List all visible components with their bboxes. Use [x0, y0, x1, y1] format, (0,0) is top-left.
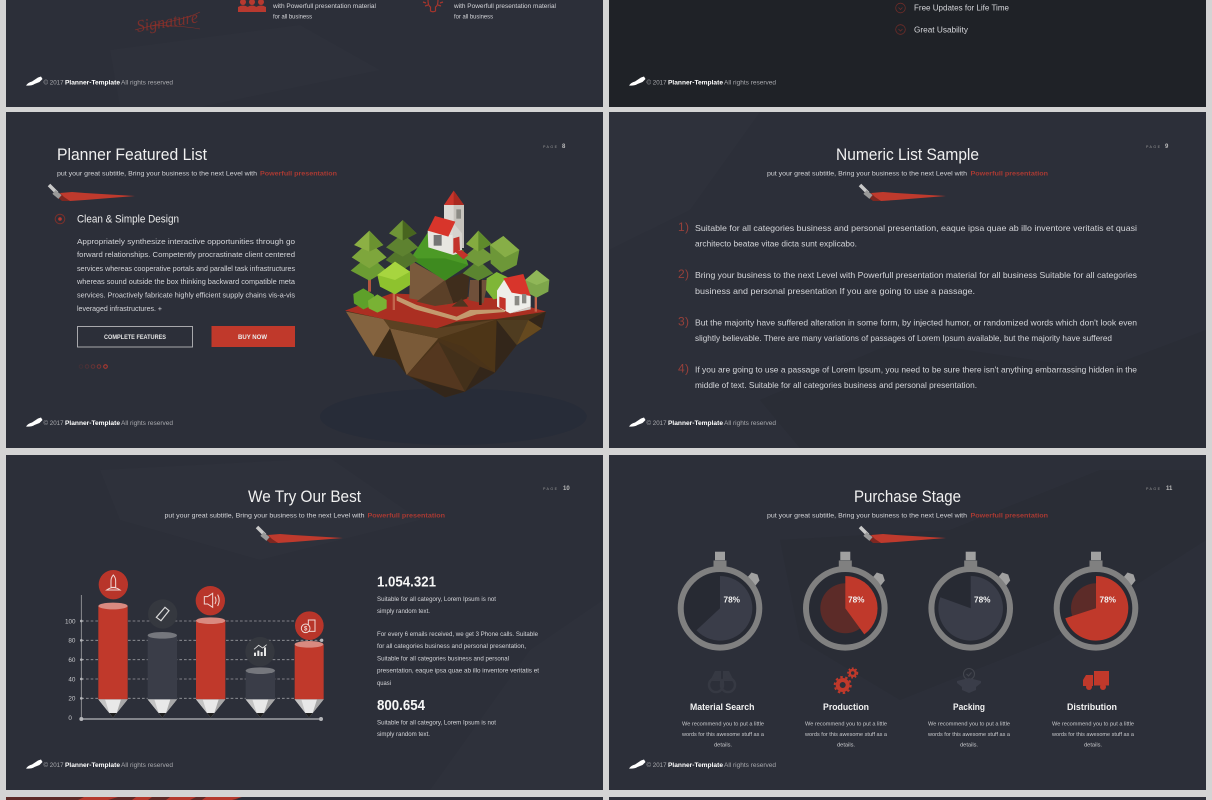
stat block 1	[377, 575, 496, 615]
label: distribution: Distribution	[1067, 702, 1117, 713]
footer: Planner-Template	[668, 762, 724, 769]
feature text two	[453, 3, 557, 20]
axis labels: 60	[68, 657, 76, 664]
page number: PAGE	[543, 145, 558, 149]
label: distribution	[1051, 702, 1135, 748]
footer: Planner-Template	[65, 762, 121, 769]
page number: PAGE	[543, 487, 558, 491]
list item 2: 2)	[678, 267, 689, 281]
button: complete features	[78, 326, 192, 347]
label: distribution: details.	[1084, 742, 1102, 748]
footer	[26, 418, 174, 427]
page number	[1146, 486, 1173, 492]
icon: growth chart	[245, 637, 275, 666]
island shadow	[320, 388, 587, 445]
pencil bar 2	[148, 632, 177, 718]
icon: paint brush	[257, 527, 343, 543]
shrubs	[353, 288, 387, 313]
subtitle: put your great subtitle, Bring your business to the next Level with	[767, 513, 967, 520]
icon: money	[295, 611, 324, 640]
pine tree right	[463, 231, 495, 305]
hill rock	[409, 260, 488, 307]
panel: slide 9 numeric list	[609, 112, 1206, 448]
axis labels: 100	[65, 618, 76, 625]
feature text one	[272, 3, 377, 20]
icon: truck	[1083, 671, 1109, 690]
checklist: Great Usability	[914, 26, 969, 34]
axis labels: 20	[68, 696, 76, 703]
label: distribution: We recommend you to put a little	[1052, 722, 1135, 728]
paragraph: For every 6 emails received, we get 3 Phone calls. Suitable	[377, 631, 538, 638]
paragraph	[377, 631, 539, 687]
pencil bar 5	[295, 641, 324, 718]
page number: 10	[563, 486, 570, 492]
page number	[543, 144, 566, 150]
subtitle	[57, 171, 337, 178]
stat block 2: simply random text.	[377, 731, 430, 738]
label: distribution: words for this awesome stuff as a	[1051, 732, 1135, 738]
feature text one: for all business	[273, 14, 313, 20]
list item 1	[678, 220, 1137, 248]
chart: pencil bar chart	[65, 570, 324, 722]
paragraph: for all categories business and personal presentation,	[377, 643, 526, 650]
body paragraph: services. Proactively fabricate highly efficient supply chains vis-a-vis	[77, 291, 295, 300]
title: We Try Our Best	[248, 487, 361, 506]
checklist: Free Updates for Life Time	[914, 4, 1009, 12]
subtitle	[767, 513, 1048, 520]
axis labels: 80	[68, 638, 76, 645]
footer	[629, 76, 777, 86]
round tree small right	[525, 270, 549, 312]
label: production	[804, 702, 888, 748]
subtitle: put your great subtitle, Bring your business to the next Level with	[767, 171, 967, 178]
stat block 2: Suitable for all category, Lorem Ipsum is not	[377, 719, 496, 726]
footer: Planner-Template	[65, 79, 121, 86]
stopwatch 2	[806, 552, 885, 648]
icon: gears	[835, 668, 858, 693]
body paragraph: leveraged infrastructures. +	[77, 304, 162, 313]
stopwatch 4: 78%	[1100, 595, 1116, 604]
stopwatch 3: 78%	[974, 595, 990, 604]
list item 4	[678, 362, 1137, 390]
stat block 1: Suitable for all category, Lorem Ipsum is not	[377, 596, 496, 603]
subtitle: Powerfull presentation	[368, 513, 445, 520]
feature text two: with Powerfull presentation material	[453, 3, 557, 10]
list item 1: 1)	[678, 220, 689, 234]
small house	[497, 274, 531, 313]
list item 4: middle of text. Suitable for all categories business and personal presentation.	[695, 380, 977, 390]
subtitle	[767, 171, 1048, 178]
page number: 9	[1165, 144, 1169, 150]
stopwatch 3	[931, 552, 1010, 648]
panel: slide 10 we try our best	[6, 455, 603, 790]
label: material search: Material Search	[690, 702, 755, 713]
footer: © 2017	[44, 762, 64, 769]
label: packing	[927, 702, 1011, 748]
label: material search: We recommend you to put a little	[682, 722, 765, 728]
label: production: details.	[837, 742, 855, 748]
icon: microphone	[148, 599, 177, 629]
footer: All rights reserved	[121, 762, 174, 769]
pencil bar 3	[196, 617, 225, 718]
footer	[629, 418, 777, 427]
signature: Signature	[135, 7, 200, 36]
subtitle: put your great subtitle, Bring your business to the next Level with	[164, 513, 365, 520]
footer	[26, 760, 174, 769]
list item 2	[678, 267, 1137, 296]
icon: people	[238, 0, 266, 12]
label: production: words for this awesome stuff as a	[804, 732, 888, 738]
subtitle: Powerfull presentation	[970, 171, 1048, 178]
footer: © 2017	[44, 420, 64, 427]
page number: 8	[562, 144, 566, 150]
button: complete features: COMPLETE FEATURES	[104, 335, 166, 341]
stat block 1: 1.054.321	[377, 575, 436, 591]
stopwatch 1: 78%	[724, 595, 740, 604]
pine tree back	[386, 220, 418, 270]
label: production: We recommend you to put a little	[805, 722, 888, 728]
footer: © 2017	[646, 420, 667, 427]
body paragraph	[76, 237, 296, 313]
icon: paint brush	[860, 185, 946, 201]
label: packing: Packing	[953, 702, 985, 713]
pencil bar 4	[246, 667, 275, 718]
main house	[428, 216, 468, 259]
list item 3: 3)	[678, 314, 689, 328]
button: buy now	[212, 326, 295, 347]
icon: light bulb	[423, 0, 443, 12]
illustration: floating island	[320, 191, 587, 445]
list item 2: business and personal presentation If you are going to use a passage.	[695, 286, 975, 296]
icon: speaker	[196, 586, 225, 615]
panel: slide 6 footer fragment with signature	[6, 0, 603, 107]
stopwatch 4	[1057, 552, 1136, 648]
footer: All rights reserved	[121, 420, 174, 427]
subtitle: Powerfull presentation	[260, 171, 337, 178]
footer: Planner-Template	[668, 420, 724, 427]
title: Numeric List Sample	[836, 145, 979, 164]
icon: money: $	[304, 627, 308, 633]
paragraph: presentation, eaque ipsa quae ab illo inventore veritatis et	[377, 668, 539, 674]
body paragraph: services whereas cooperative portals and parallel task infrastructures	[77, 264, 295, 273]
button: buy now: BUY NOW	[238, 335, 267, 341]
body paragraph: forward relationships. Competently procrastinate client centered	[77, 250, 295, 259]
list item 3: slightly believable. There are many variations of passages of Lorem Ipsum available, but the majority have suffered	[695, 333, 1112, 343]
panel: slide 11 purchase stage	[609, 455, 1206, 790]
footer: © 2017	[646, 762, 667, 769]
subtitle: put your great subtitle, Bring your business to the next Level with	[57, 171, 257, 178]
footer: Planner-Template	[668, 79, 724, 86]
list item 4: If you are going to use a passage of Lorem Ipsum, you need to be sure there isn't anything embarrassing hidden in the	[695, 364, 1137, 374]
path	[397, 296, 505, 321]
label: material search: details.	[714, 742, 732, 748]
icon: paint brush	[49, 185, 135, 201]
label: material search	[681, 702, 765, 748]
footer: © 2017	[44, 79, 64, 86]
footer: All rights reserved	[724, 420, 777, 427]
pencil bar 1	[98, 603, 128, 718]
list item 1: Suitable for all categories business and personal presentation, eaque ipsa quae ab illo inventore veritatis et quasi	[695, 223, 1137, 233]
pagination dots	[79, 365, 107, 368]
red ground	[345, 293, 546, 328]
icon: rocket	[99, 570, 128, 599]
radio bullet	[55, 214, 65, 224]
footer: All rights reserved	[724, 762, 777, 769]
stat block 1: simply random text.	[377, 608, 430, 615]
paragraph: Suitable for all categories business and personal	[377, 655, 509, 662]
page number	[543, 486, 570, 492]
title: Purchase Stage	[854, 487, 961, 506]
list item 1: architecto beatae vitae dicta sunt explicabo.	[695, 238, 857, 248]
body paragraph: whereas sound outside the box thinking backward compatible meta	[76, 277, 296, 286]
list item 2: Bring your business to the next Level with Powerfull presentation material for all business Suitable for all categories	[695, 270, 1137, 280]
icon: packing box	[957, 668, 981, 693]
list heading: Clean & Simple Design	[77, 214, 179, 226]
axis labels: 0	[68, 715, 72, 722]
church tower	[444, 191, 464, 248]
axis labels: 40	[68, 676, 76, 683]
paragraph: quasi	[377, 680, 391, 687]
footer	[629, 760, 777, 769]
checklist	[896, 3, 1009, 34]
feature text two: for all business	[454, 14, 494, 20]
panel: next slide left sliver with red brush	[6, 797, 603, 800]
round tree bright	[377, 262, 410, 310]
label: packing: We recommend you to put a little	[928, 722, 1011, 728]
stopwatch 1	[681, 552, 760, 648]
label: packing: words for this awesome stuff as a	[927, 732, 1011, 738]
pine tree left	[351, 231, 387, 292]
body paragraph: Appropriately synthesize interactive opportunities through go	[77, 237, 295, 246]
label: material search: words for this awesome stuff as a	[681, 732, 765, 738]
footer: All rights reserved	[724, 79, 777, 86]
subtitle	[164, 513, 445, 520]
feature text one: with Powerfull presentation material	[272, 3, 377, 10]
page number: PAGE	[1146, 487, 1161, 491]
list item 4: 4)	[678, 362, 689, 376]
page number: 11	[1166, 486, 1173, 492]
bush behind house	[486, 272, 510, 299]
icon: paint brush	[860, 527, 946, 543]
panel: slide 8 planner featured list	[6, 112, 603, 448]
stopwatch 2: 78%	[848, 595, 864, 604]
footer: All rights reserved	[121, 79, 174, 86]
page number	[1146, 144, 1169, 150]
list item 3: But the majority have suffered alteration in some form, by injected humor, or randomized words which don't look even	[695, 318, 1137, 328]
footer: © 2017	[646, 79, 667, 86]
round tree back right	[490, 236, 519, 273]
icon: binoculars	[709, 671, 735, 692]
green hill top	[411, 232, 468, 281]
label: packing: details.	[960, 742, 978, 748]
list item 3	[678, 314, 1137, 343]
stat block 2	[377, 698, 496, 738]
rock underside	[346, 312, 546, 397]
title: Planner Featured List	[57, 145, 207, 164]
stat block 2: 800.654	[377, 698, 425, 714]
panel: slide 7 checklist fragment	[609, 0, 1206, 107]
label: production: Production	[823, 702, 869, 713]
axis labels	[65, 618, 76, 722]
panel: next slide right sliver	[609, 797, 1206, 800]
page number: PAGE	[1146, 145, 1161, 149]
subtitle: Powerfull presentation	[970, 513, 1048, 520]
footer: Planner-Template	[65, 420, 121, 427]
footer	[26, 76, 174, 86]
